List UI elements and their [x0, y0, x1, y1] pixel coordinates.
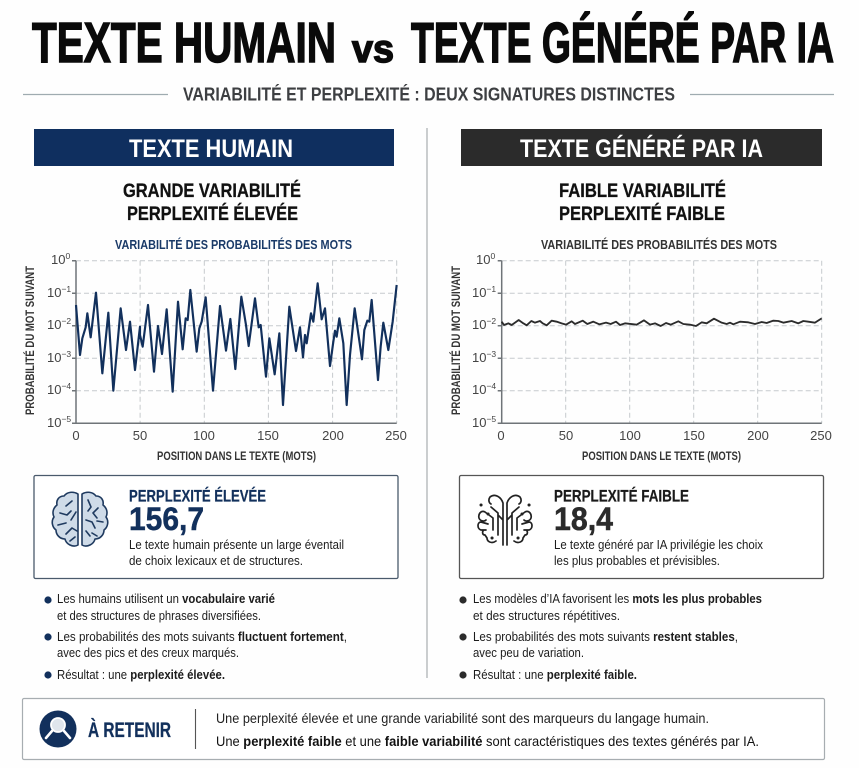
icon: magnifying glass [40, 710, 76, 748]
chart: probabilités humain: −4 [61, 381, 71, 391]
panel: texte généré par IA [448, 129, 832, 682]
heading: faible variabilité: PERPLEXITÉ FAIBLE [559, 202, 725, 225]
header: texte généré par IA: TEXTE GÉNÉRÉ PAR IA [520, 134, 763, 163]
bullet list: IA: et des structures répétitives. [473, 608, 620, 623]
chart: probabilités humain: −5 [61, 414, 71, 424]
chart: probabilités IA: 10 [476, 252, 490, 267]
main title: vs [352, 28, 394, 71]
header: texte généré par IA [461, 129, 822, 166]
card: perplexité faible: 18,4 [554, 501, 613, 537]
main title: TEXTE HUMAIN [32, 11, 336, 75]
callout: à retenir: À RETENIR [88, 719, 171, 742]
chart: probabilités humain: 10 [47, 382, 61, 397]
chart: probabilités IA: −1 [486, 284, 496, 294]
chart: probabilités humain: VARIABILITÉ DES PROBABILITÉS DES MOTS [115, 237, 352, 252]
bullet list: humain [44, 591, 347, 682]
chart: probabilités humain [22, 237, 407, 463]
chart: probabilités IA: 200 [747, 428, 769, 443]
chart: probabilités IA: −4 [486, 381, 496, 391]
chart: probabilités IA: −2 [486, 316, 496, 326]
bullet list: humain: Résultat : une perplexité élevée. [57, 667, 225, 682]
chart: probabilités humain: −1 [61, 284, 71, 294]
callout: à retenir [22, 698, 824, 760]
card: perplexité élevée: Le texte humain présente un large éventail [129, 537, 344, 552]
chart: probabilités humain: 10 [47, 317, 61, 332]
bullet list: IA [459, 591, 762, 682]
chart: probabilités humain: −2 [61, 316, 71, 326]
chart: probabilités IA: PROBABILITÉ DU MOT SUIVANT [448, 265, 463, 415]
chart: probabilités humain: 200 [322, 428, 344, 443]
header: texte humain: TEXTE HUMAIN [129, 135, 293, 163]
chart: probabilités humain: 100 [193, 428, 215, 443]
heading: grande variabilité: GRANDE VARIABILITÉ [123, 179, 301, 202]
bullet list: IA: Les probabilités des mots suivants restent stables, [473, 629, 738, 644]
chart: probabilités humain: PROBABILITÉ DU MOT SUIVANT [22, 265, 37, 415]
callout: à retenir: Une perplexité élevée et une grande variabilité sont des marqueurs du langage humain. [216, 710, 709, 726]
bullet list: humain: Les probabilités des mots suivants fluctuent fortement, [57, 629, 347, 644]
chart: probabilités humain: 10 [47, 350, 61, 365]
chart: probabilités IA: 250 [810, 428, 832, 443]
chart: probabilités humain: 250 [385, 428, 407, 443]
chart: probabilités IA: 0 [490, 251, 495, 261]
chart: probabilités humain: 10 [51, 252, 65, 267]
header: texte humain [34, 129, 394, 166]
chart: probabilités IA: 10 [472, 350, 486, 365]
heading: grande variabilité: PERPLEXITÉ ÉLEVÉE [127, 202, 298, 225]
chart: probabilités IA: 50 [559, 428, 573, 443]
chart: probabilités IA [448, 237, 832, 463]
card: perplexité élevée: de choix lexicaux et de structures. [129, 553, 303, 568]
bullet list: humain: et des structures de phrases diversifiées. [57, 608, 261, 623]
chart: probabilités IA: 10 [472, 415, 486, 430]
bullet list: IA: Les modèles d’IA favorisent les mots les plus probables [473, 591, 762, 606]
chart: probabilités humain: 10 [47, 415, 61, 430]
chart: probabilités IA: 10 [472, 317, 486, 332]
panel: texte humain [22, 129, 407, 682]
chart: probabilités humain: 0 [72, 428, 80, 443]
bullet list: IA: Résultat : une perplexité faible. [473, 667, 637, 682]
chart: probabilités IA: POSITION DANS LE TEXTE (MOTS) [582, 449, 741, 463]
chart: probabilités IA: 10 [472, 285, 486, 300]
bullet list: IA: avec peu de variation. [473, 645, 584, 660]
card: perplexité élevée: PERPLEXITÉ ÉLEVÉE [129, 486, 266, 506]
chart: probabilités IA: 100 [619, 428, 641, 443]
chart: probabilités IA: 0 [497, 428, 505, 443]
chart: probabilités IA: VARIABILITÉ DES PROBABILITÉS DES MOTS [541, 237, 777, 252]
bullet list: humain: avec des pics et des creux marqués. [57, 645, 239, 660]
callout: à retenir: Une perplexité faible et une faible variabilité sont caractéristiques des textes générés par IA. [216, 733, 759, 749]
bullet list: humain: Les humains utilisent un vocabulaire varié [57, 591, 275, 606]
heading: faible variabilité [559, 179, 726, 225]
icon: human brain [52, 492, 108, 546]
heading: faible variabilité: FAIBLE VARIABILITÉ [559, 179, 726, 202]
card: perplexité faible [460, 476, 824, 578]
chart: probabilités humain: 0 [65, 251, 70, 261]
chart: probabilités humain: 150 [257, 428, 279, 443]
chart: probabilités IA: −5 [486, 414, 496, 424]
subtitle: VARIABILITÉ ET PERPLEXITÉ : DEUX SIGNATURES DISTINCTES [183, 84, 675, 104]
heading: grande variabilité [123, 179, 301, 225]
chart: probabilités humain: −3 [61, 349, 71, 359]
chart: probabilités humain: POSITION DANS LE TEXTE (MOTS) [157, 449, 316, 463]
card: perplexité faible: PERPLEXITÉ FAIBLE [554, 486, 689, 506]
card: perplexité élevée [34, 476, 398, 578]
chart: probabilités humain: 50 [133, 428, 147, 443]
main title [32, 11, 834, 75]
icon: circuit brain [478, 495, 532, 545]
chart: probabilités IA: 10 [472, 382, 486, 397]
chart: probabilités humain: 10 [47, 285, 61, 300]
card: perplexité élevée: 156,7 [129, 501, 204, 537]
card: perplexité faible: les plus probables et prévisibles. [554, 553, 720, 568]
chart: probabilités IA: −3 [486, 349, 496, 359]
chart: probabilités IA: 150 [683, 428, 705, 443]
card: perplexité faible: Le texte généré par IA privilégie les choix [554, 537, 763, 552]
column divider [426, 128, 428, 678]
